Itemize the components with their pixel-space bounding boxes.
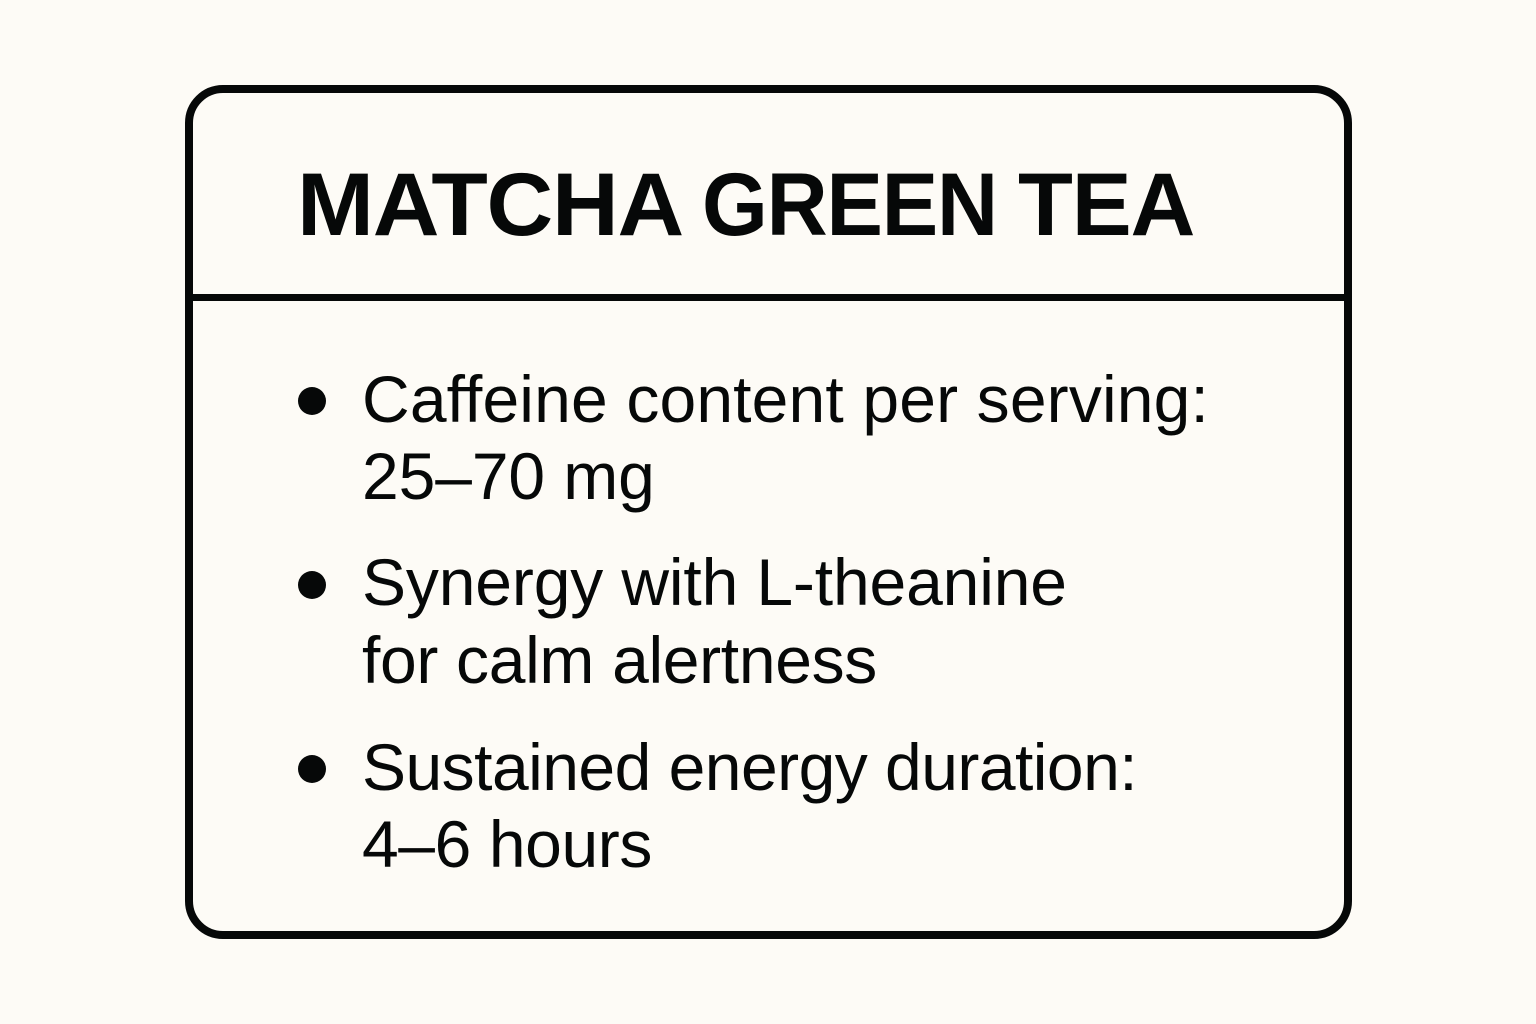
bullet 2 text: Synergy with L-theanine bbox=[362, 545, 1067, 619]
title: TEA bbox=[1018, 154, 1194, 254]
bullet 3 text: Sustained energy duration: bbox=[362, 730, 1137, 804]
bullet 3 text: 4–6 hours bbox=[362, 807, 652, 881]
title: GREEN bbox=[702, 154, 997, 254]
bullet 1 text: 25–70 mg bbox=[362, 439, 655, 513]
header divider bbox=[190, 294, 1347, 301]
bullet 1 text: Caffeine content per serving: bbox=[362, 362, 1209, 436]
bullet 3 dot bbox=[298, 755, 326, 783]
bullet 2 text: for calm alertness bbox=[362, 623, 877, 697]
bullet 1 dot bbox=[298, 387, 326, 415]
title: MATCHA bbox=[297, 154, 683, 254]
bullet 2 text bbox=[362, 545, 1067, 697]
title bbox=[297, 154, 1194, 254]
panel: matcha green tea card bbox=[185, 85, 1352, 939]
bullet 2 dot bbox=[298, 571, 326, 599]
bullet 1 text bbox=[362, 362, 1209, 513]
bullet 3 text bbox=[362, 730, 1137, 881]
